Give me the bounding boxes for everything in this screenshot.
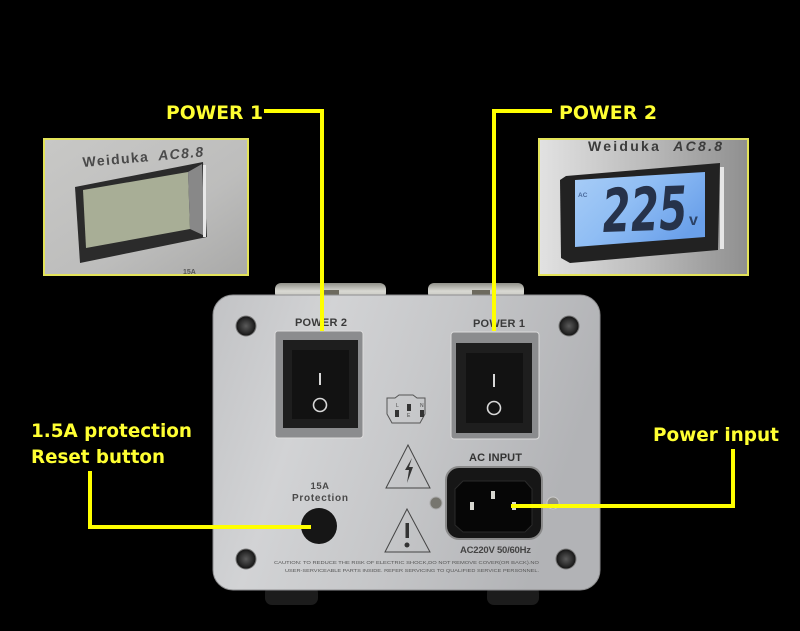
lit LCD screen [560,163,724,263]
switch label: power 2: POWER 2 [295,317,347,329]
protection label: 15A [311,481,329,492]
caution text: CAUTION: TO REDUCE THE RISK OF ELECTRIC SHOCK,DO NOT REMOVE COVER(OR BACK).NO [274,560,539,566]
left display photo: blank LCD [44,139,248,276]
callout: reset button [31,420,311,527]
caution text: USER-SERVICEABLE PARTS INSIDE. REFER SERVICING TO QUALIFIED SERVICE PERSONNEL. [285,568,539,574]
AC power inlet [446,467,542,539]
rocker switch: power 1 [451,332,539,439]
callout: power 1 [166,102,322,331]
wiring diagram icon: E [407,413,411,419]
corner screws [236,316,579,569]
voltage reading: 225 [601,174,688,247]
lit LCD screen: v [689,212,698,229]
callout: power 2: POWER 2 [559,102,657,124]
blank LCD screen [75,162,207,263]
callout: power 1: POWER 1 [166,102,263,124]
callout: power input: Power input [653,424,779,446]
caution text [274,560,539,574]
wiring diagram icon [387,395,425,423]
rear plugs behind chassis [275,283,524,299]
callout: power 2 [494,102,657,331]
icon: caution warning [385,509,430,552]
AC input label: AC INPUT [469,452,522,464]
device front panel [213,295,600,590]
lit LCD screen: AC [578,192,588,199]
callout: power input [511,424,779,506]
brand label left: Weiduka AC8.8 [82,143,204,170]
right display photo: lit LCD [539,138,748,275]
callout: reset button: 1.5A protection [31,420,192,442]
callout: reset button: Reset button [31,446,165,468]
cropped rating text: 15A [183,269,196,276]
wiring diagram icon: N [420,403,424,409]
device front panel: Protection [292,493,348,504]
feet [265,586,539,605]
wiring diagram icon: L [396,403,399,409]
mounting screws [430,497,559,509]
reset button [301,508,337,544]
icon: high voltage warning [386,445,430,488]
brand label right: Weiduka AC8.8 [588,138,722,154]
switch label: power 1: POWER 1 [473,318,525,330]
voltage rating: AC220V 50/60Hz [460,545,531,556]
rocker switch: power 2 [275,331,363,438]
